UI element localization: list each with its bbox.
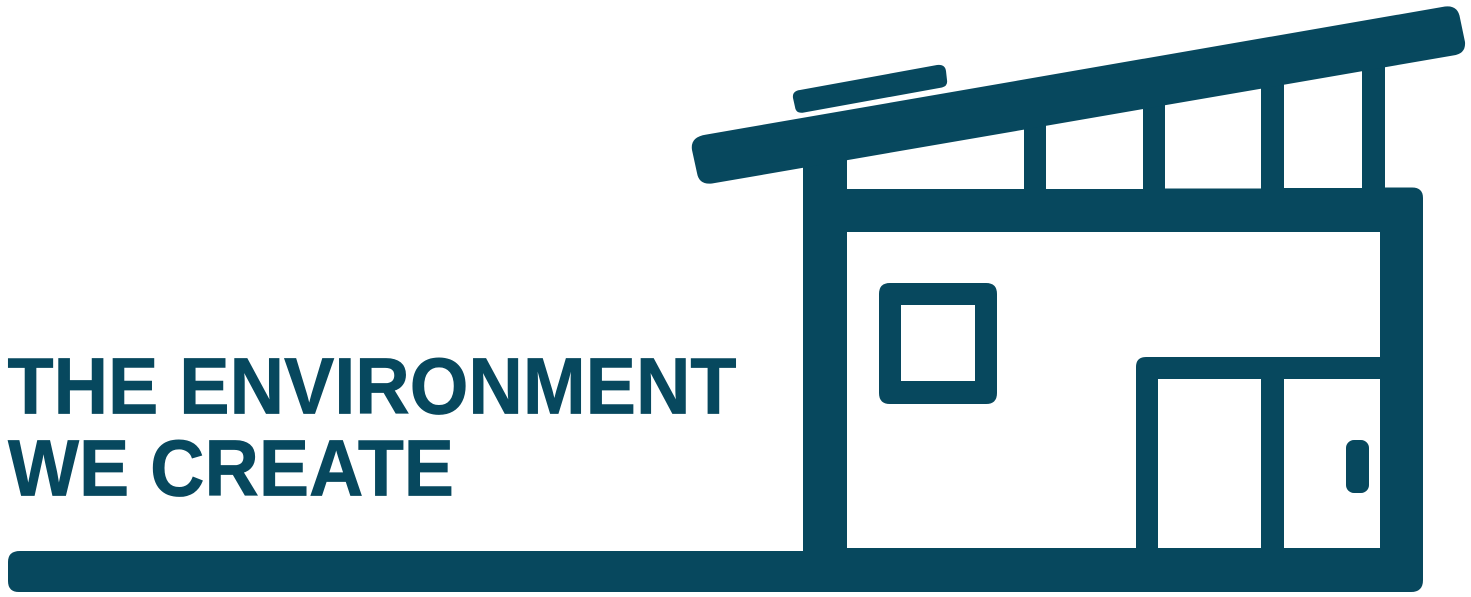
- title: [8, 342, 736, 512]
- window: [879, 283, 997, 404]
- sloped roof: [692, 6, 1465, 184]
- title: THE ENVIRONMENT: [8, 342, 736, 430]
- door frame: [1136, 357, 1381, 550]
- solar panel: [793, 65, 947, 113]
- door handle: [1346, 440, 1369, 493]
- wall post: [803, 160, 847, 560]
- title: WE CREATE: [8, 424, 454, 512]
